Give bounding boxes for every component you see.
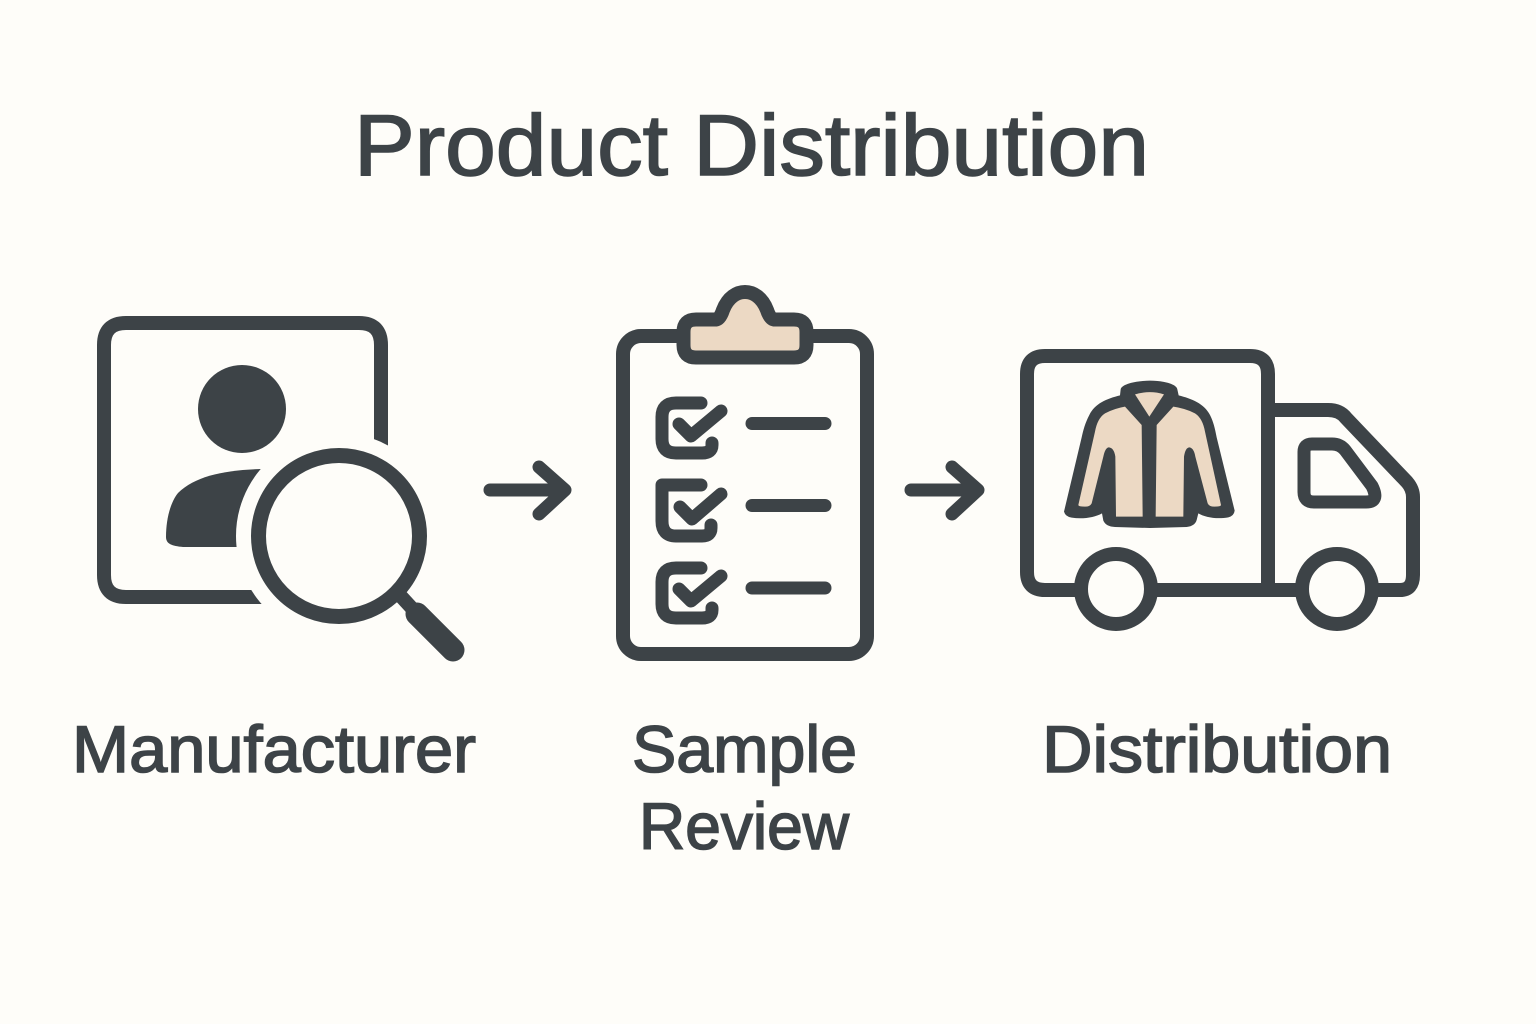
clipboard clip [684, 292, 806, 358]
label: Sample Review [632, 712, 857, 863]
jacket outline [1064, 381, 1235, 528]
arrow: manufacturer to sample review [490, 467, 565, 514]
magnifier halo [252, 449, 426, 623]
checklist row 1 [662, 403, 825, 453]
label: Manufacturer: Manufacturer [72, 712, 476, 786]
icon: manufacturer profile with magnifier [104, 323, 453, 650]
checklist row 3 [662, 568, 825, 618]
clipboard board [623, 336, 867, 654]
profile frame [104, 323, 381, 597]
front wheel [1302, 554, 1372, 624]
person head [198, 365, 286, 453]
label: Distribution: Distribution [1042, 712, 1392, 786]
arrow: sample review to distribution [911, 467, 978, 514]
jacket collar [1135, 392, 1164, 417]
label: Sample Review: Review [639, 789, 849, 863]
icon: delivery truck with jacket [1027, 356, 1413, 624]
jacket [1064, 381, 1235, 528]
icon: clipboard checklist [623, 292, 867, 654]
label: Sample Review: Sample [632, 712, 857, 786]
magnifier ring [258, 456, 420, 616]
magnifier handle [397, 592, 453, 650]
jacket left panel [1078, 407, 1143, 517]
jacket right panel [1156, 407, 1221, 517]
checklist row 2 [662, 485, 825, 536]
title: Product Distribution [354, 98, 1149, 194]
cab window [1304, 444, 1375, 502]
person shoulders [166, 469, 270, 547]
truck body [1027, 356, 1413, 590]
rear wheel [1081, 554, 1151, 624]
